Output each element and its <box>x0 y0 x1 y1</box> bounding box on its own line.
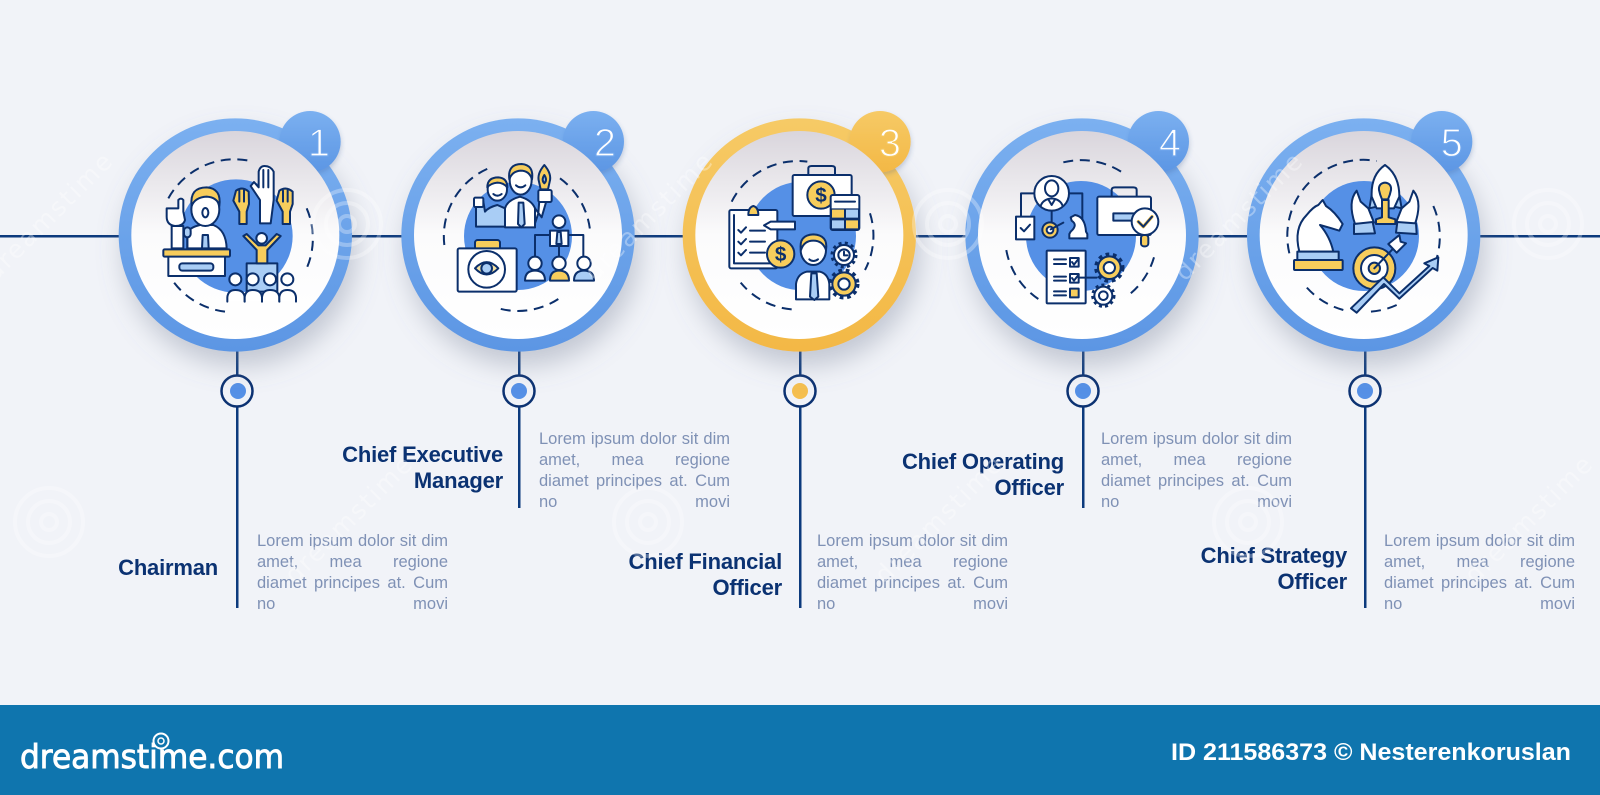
icon: chess knight <box>1294 200 1343 270</box>
watermark overlay: dreamstime <box>1459 449 1599 589</box>
text block 2: amet, mea regione <box>539 451 730 469</box>
connector 1 <box>222 345 252 608</box>
watermark overlay: dreamstime <box>869 449 1009 589</box>
text block 5: diamet principes at. Cum <box>1384 574 1575 592</box>
footer logo: dreamstime.com <box>20 737 284 776</box>
text block 4: diamet principes at. Cum <box>1101 472 1292 490</box>
text block 2: Lorem ipsum dolor sit dim <box>539 430 730 448</box>
text block 2: no movi <box>539 493 730 511</box>
text block 4: Lorem ipsum dolor sit dim <box>1101 430 1292 448</box>
heading: Chief Executive Manager: Manager <box>414 468 503 493</box>
heading: Chairman: Chairman <box>118 555 218 580</box>
icon: raised hands <box>233 166 293 224</box>
connector 4 <box>1068 345 1098 508</box>
icon: speaker at podium <box>163 187 230 276</box>
panel: step 3 circle <box>683 111 916 352</box>
icon: operating team chart <box>1016 176 1087 239</box>
icon: money briefcase <box>793 166 852 216</box>
text block 4: no movi <box>1101 493 1292 511</box>
icon: rocket with bulb and hands <box>1352 165 1418 234</box>
icon: org chart <box>525 215 594 281</box>
heading: Chief Strategy Officer: Officer <box>1277 569 1347 594</box>
watermark overlay: dreamstime <box>1169 146 1309 286</box>
text block 3: Lorem ipsum dolor sit dim <box>817 532 1008 550</box>
text block 5: no movi <box>1384 595 1575 613</box>
heading: Chief Financial Officer <box>629 549 782 600</box>
number 3: 3 <box>879 121 901 165</box>
text block 3: amet, mea regione <box>817 553 1008 571</box>
icon: calculator <box>831 195 859 230</box>
text block 2: diamet principes at. Cum <box>539 472 730 490</box>
watermark overlay: dreamstime <box>579 146 719 286</box>
text block 3: diamet principes at. Cum <box>817 574 1008 592</box>
text block 4: amet, mea regione <box>1101 451 1292 469</box>
heading: Chief Executive Manager: Chief Executive <box>342 442 503 467</box>
icon: financial officer with gears <box>796 234 858 300</box>
watermark overlay: dreamstime <box>279 449 419 589</box>
number 4: 4 <box>1159 121 1181 165</box>
text block 4 <box>1101 430 1292 511</box>
footer band <box>0 705 1600 795</box>
text block 5: amet, mea regione <box>1384 553 1575 571</box>
icon: briefcase with magnifier <box>1097 187 1158 246</box>
icon: briefcase with eye <box>458 240 517 292</box>
text block 5: Lorem ipsum dolor sit dim <box>1384 532 1575 550</box>
heading: Chief Executive Manager <box>342 442 503 493</box>
footer credit: ID 211586373 © Nesterenkoruslan <box>1171 739 1571 766</box>
icon: executives <box>474 164 552 227</box>
text block 1: diamet principes at. Cum <box>257 574 448 592</box>
text block 3: no movi <box>817 595 1008 613</box>
icon: checklist and gears <box>1047 251 1123 306</box>
icon: money briefcase: $ <box>815 184 827 207</box>
icon: clipboard and coin: $ <box>775 243 787 266</box>
icon: growth arrow <box>1351 257 1438 313</box>
connector 3 <box>784 345 816 608</box>
text block 5 <box>1384 532 1575 613</box>
text block 1: no movi <box>257 595 448 613</box>
text block 1 <box>257 532 448 613</box>
connector 5 <box>1350 345 1380 608</box>
text block 3 <box>817 532 1008 613</box>
text block 2 <box>539 430 730 511</box>
text block 1: Lorem ipsum dolor sit dim <box>257 532 448 550</box>
panel: step 4 circle <box>965 111 1199 352</box>
icon: target with arrow <box>1353 235 1406 289</box>
heading: Chief Strategy Officer <box>1201 543 1348 594</box>
heading: Chief Financial Officer: Chief Financial <box>629 549 782 574</box>
icon: audience with leader <box>227 233 296 302</box>
heading: Chief Strategy Officer: Chief Strategy <box>1201 543 1347 568</box>
heading: Chief Operating Officer: Chief Operating <box>902 449 1064 474</box>
connector 2 <box>504 345 534 508</box>
number 5: 5 <box>1441 121 1463 165</box>
icon: clipboard and coin <box>729 206 795 268</box>
panel: step 5 circle <box>1247 111 1480 352</box>
text block 1: amet, mea regione <box>257 553 448 571</box>
panel: step 1 circle <box>119 111 352 352</box>
heading: Chief Financial Officer: Officer <box>712 575 782 600</box>
heading: Chief Operating Officer <box>902 449 1064 500</box>
panel: step 2 circle <box>401 111 635 352</box>
heading: Chief Operating Officer: Officer <box>994 475 1064 500</box>
number 2: 2 <box>594 121 616 165</box>
number 1: 1 <box>308 121 330 165</box>
timeline horizontal line <box>0 235 1600 238</box>
